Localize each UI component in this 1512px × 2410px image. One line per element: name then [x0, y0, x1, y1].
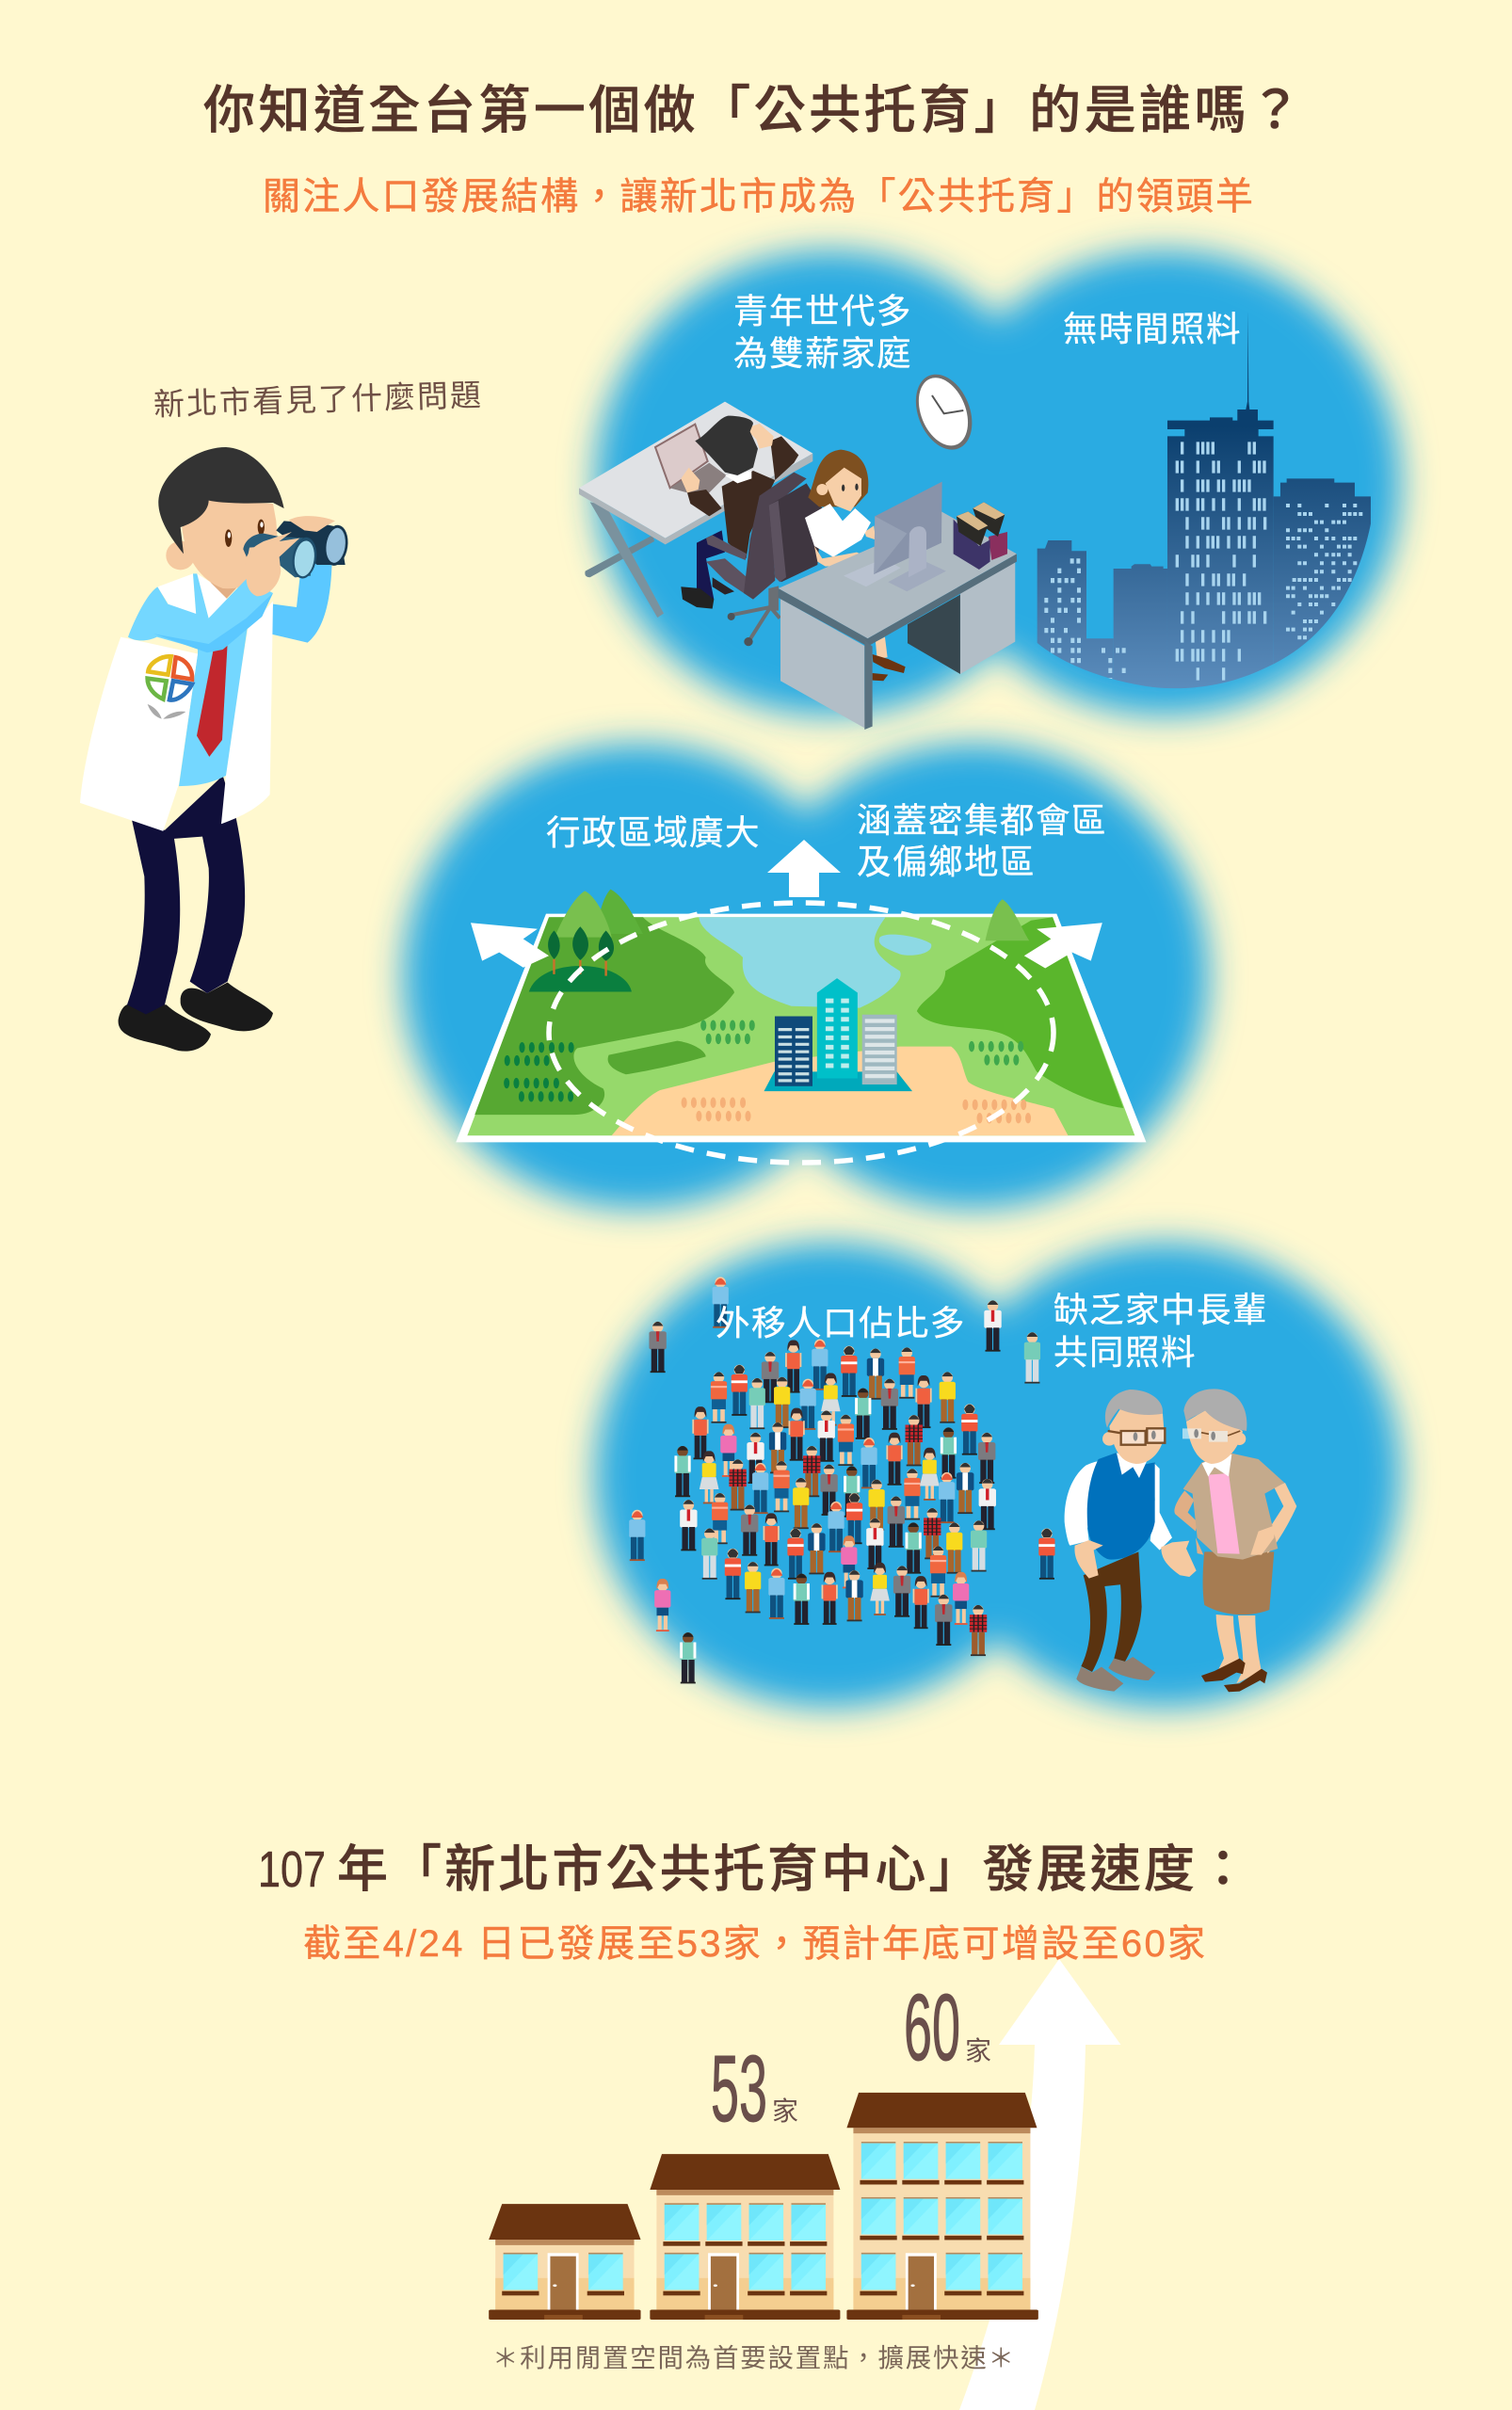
binoculars panel 1: dual-income families	[579, 250, 1401, 730]
label: city and rural coverage: 及偏鄉地區	[857, 843, 1036, 881]
label: city and rural coverage	[857, 801, 1107, 881]
medium building	[650, 2154, 840, 2320]
back arm	[270, 562, 332, 643]
field rows	[504, 1042, 574, 1102]
trees	[529, 890, 1029, 991]
number: 60 homes: 60	[904, 1975, 960, 2081]
elderly couple	[1065, 1389, 1296, 1692]
section heading: development speed: 年「新北市公共托育中心」發展速度：	[337, 1841, 1248, 1898]
caption: what the city sees: 新北市看見了什麼問題	[153, 378, 483, 422]
map	[456, 890, 1146, 1142]
footnote: ＊利用閒置空間為首要設置點，擴展快速＊	[492, 2343, 1014, 2372]
city skyline	[1037, 311, 1371, 690]
lens: soft blue double circle	[595, 1243, 1401, 1708]
label: dual-income: 青年世代多	[733, 292, 912, 330]
binoculars panel 3: migrants and elders	[595, 1243, 1401, 1708]
city buildings on map	[764, 978, 912, 1091]
label: no elders	[1054, 1291, 1268, 1372]
section subheading: counts: 截至4/24 日已發展至53家，預計年底可增設至60家	[303, 1923, 1205, 1965]
lens: soft blue double circle	[595, 250, 1401, 715]
coat logo	[148, 656, 192, 700]
title: 你知道全台第一個做「公共托育」的是誰嗎？	[203, 81, 1301, 139]
label: wide district: 行政區域廣大	[546, 813, 761, 852]
number: 53 homes: 家	[772, 2097, 798, 2126]
head, arm and binoculars	[128, 447, 350, 652]
arrow up	[767, 840, 841, 897]
office scene	[579, 366, 1017, 730]
character: man with binoculars	[80, 447, 350, 1052]
label: no time: 無時間照料	[1063, 310, 1242, 348]
front desk with monitor and binders	[779, 482, 1017, 730]
buildings growing in size	[489, 2093, 1038, 2320]
section heading: development speed: 107	[258, 1841, 326, 1898]
label: no elders: 缺乏家中長輩	[1054, 1291, 1268, 1329]
label: migrants: 外移人口佔比多	[716, 1304, 966, 1342]
small building	[489, 2204, 641, 2320]
label: dual-income: 為雙薪家庭	[733, 334, 912, 373]
stressed worker	[681, 416, 822, 646]
clock	[906, 366, 983, 458]
number: 60 homes: 家	[965, 2036, 991, 2065]
dashed service boundary	[549, 903, 1054, 1163]
label: dual-income	[733, 292, 912, 373]
subtitle: 關注人口發展結構，讓新北市成為「公共托育」的領頭羊	[263, 176, 1253, 217]
woman at desk	[805, 450, 876, 567]
arrow: outward right	[1024, 923, 1102, 968]
grandfather	[1065, 1390, 1197, 1692]
label: no elders: 共同照料	[1054, 1333, 1197, 1372]
number: 53 homes: 53	[711, 2036, 767, 2142]
arrow: outward left	[471, 923, 549, 968]
crowd of people	[629, 1277, 1055, 1683]
woman's shoes	[873, 637, 906, 681]
growth arrow	[959, 1959, 1120, 2410]
label: city and rural coverage: 涵蓋密集都會區	[857, 801, 1107, 840]
lens: soft blue double circle	[403, 744, 1209, 1209]
grandmother	[1174, 1389, 1296, 1692]
back desk	[579, 402, 812, 618]
lab coat, legs and tie	[80, 602, 273, 1052]
large building	[846, 2093, 1038, 2320]
binoculars panel 2: wide district map	[403, 744, 1209, 1209]
